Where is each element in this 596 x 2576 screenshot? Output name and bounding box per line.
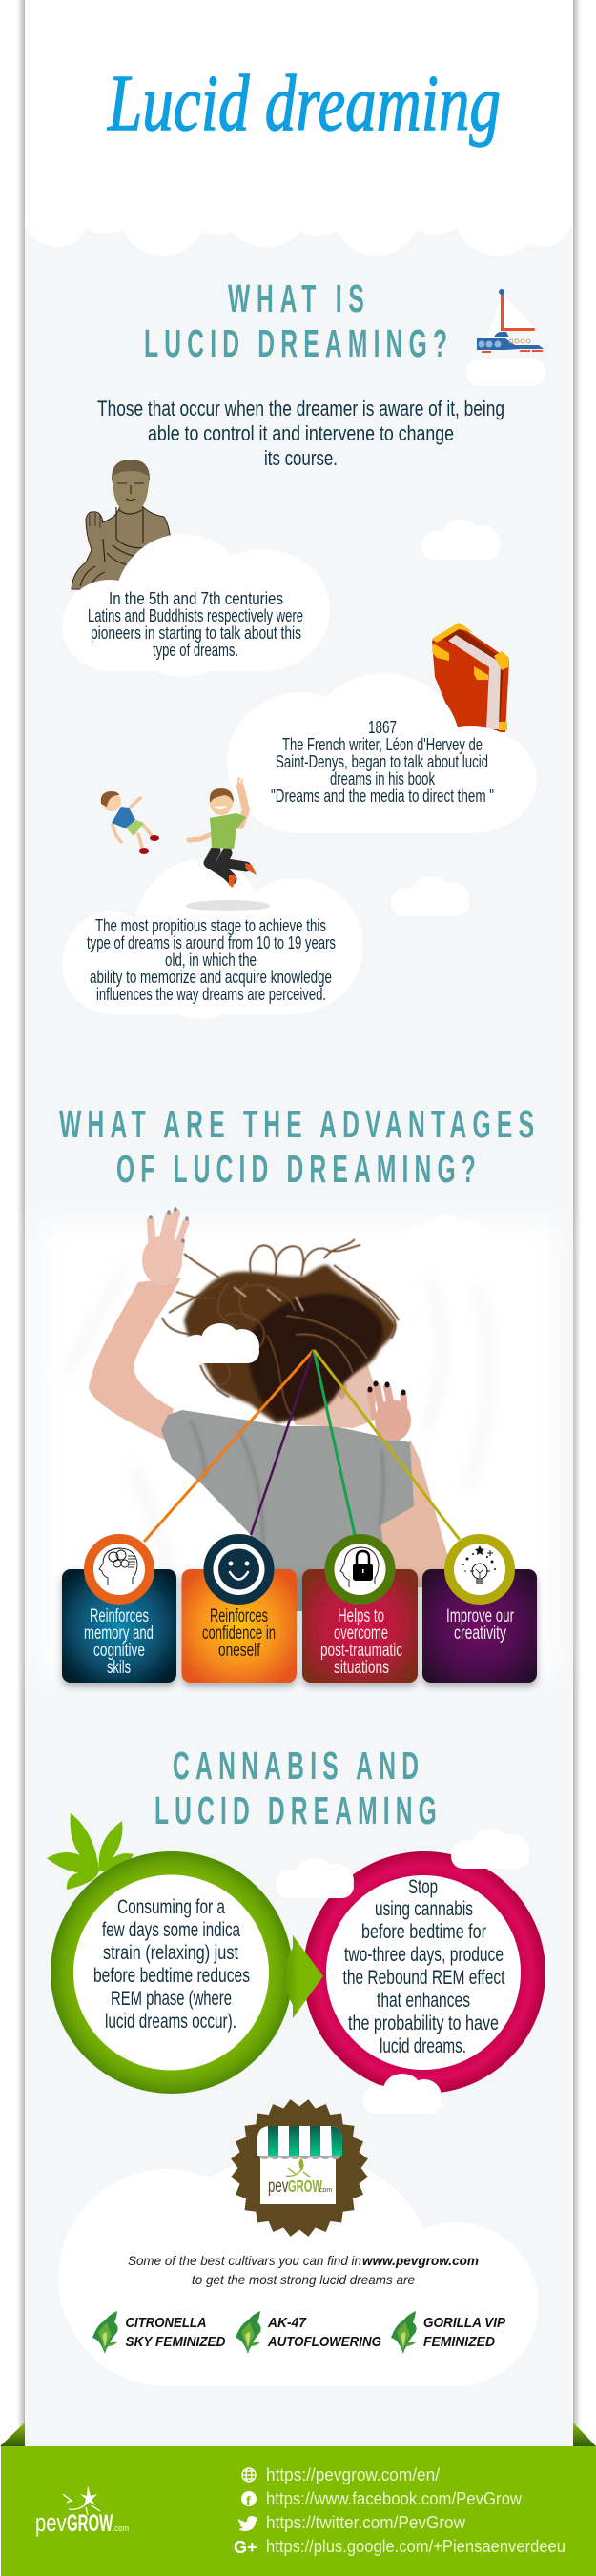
panel: most propitious stage [62, 859, 363, 1019]
panel: 5th and 7th centuries [62, 534, 330, 677]
intro text: its course. [264, 446, 338, 470]
product: gorilla vip: FEMINIZED [423, 2334, 495, 2350]
right arm [380, 1440, 450, 1587]
text: consuming indica [93, 1896, 250, 2033]
arrow [283, 1935, 323, 2018]
panel: 1867: The French writer, Léon d'Hervey de [282, 735, 483, 754]
product: citronella: CITRONELLA [126, 2315, 206, 2331]
cloud: over hair [181, 1323, 259, 1363]
card: confidence: confidence in [202, 1624, 276, 1644]
connector lines [144, 1350, 460, 1542]
footer folds [0, 2423, 596, 2446]
panel: cultivars cloud [58, 2152, 539, 2386]
panel: most propitious stage: old, in which the [165, 951, 257, 970]
panel: most propitious stage: The most propitious stage to achieve this [95, 916, 326, 935]
icon: google plus: G+ [234, 2538, 257, 2557]
text: consuming indica: REM phase (where [111, 1988, 232, 2010]
footer logo: .com [113, 2524, 129, 2533]
heading: what is lucid dreaming: WHAT IS [228, 277, 364, 321]
product: citronella [92, 2311, 226, 2354]
link: facebook: https://www.facebook.com/PevGrow [266, 2489, 523, 2508]
photo: woman sleeping on white sheets [40, 1209, 558, 1678]
heading: cannabis [154, 1745, 437, 1833]
cloud: small lower right [391, 876, 469, 916]
card: post-traumatic: situations [334, 1658, 389, 1678]
panel: 1867: 1867 [368, 718, 397, 737]
badge: shop: pev [268, 2177, 289, 2197]
card: creativity: Improve our [446, 1606, 514, 1626]
intro text [97, 397, 504, 470]
text: stop using cannabis: two-three days, produce [344, 1944, 504, 1966]
card: memory: memory and [84, 1624, 154, 1644]
footer logo: pev [35, 2508, 67, 2538]
card: confidence [181, 1569, 297, 1683]
panel: most propitious stage: ability to memorize and acquire knowledge [90, 968, 332, 987]
panel: most propitious stage: type of dreams is around from 10 to 19 years [87, 933, 336, 952]
badge: shop: GROW [288, 2177, 323, 2197]
text: stop using cannabis: lucid dreams. [380, 2035, 466, 2057]
text: cultivars intro: to get the most strong lucid dreams are [192, 2272, 415, 2287]
text: cultivars intro [128, 2253, 479, 2287]
card: post-traumatic: overcome [334, 1624, 388, 1644]
text: stop using cannabis: the Rebound REM effect [343, 1967, 505, 1989]
card: memory [62, 1569, 176, 1683]
product: ak-47: AUTOFLOWERING [267, 2334, 381, 2350]
card: post-traumatic [302, 1569, 418, 1683]
icon: smiley [208, 1539, 269, 1600]
text: consuming indica: strain (relaxing) just [103, 1942, 238, 1964]
card: memory: Reinforces [90, 1606, 149, 1626]
text: cultivars intro: Some of the best cultivars you can find in [128, 2253, 361, 2268]
icon: globe [242, 2468, 256, 2482]
footer logo: GROW [67, 2510, 113, 2537]
heading: advantages [59, 1103, 534, 1192]
text: cultivars intro: www.pevgrow.com [362, 2253, 479, 2268]
product: citronella: SKY FEMINIZED [126, 2334, 226, 2350]
icon: sailboat on cloud [466, 289, 545, 386]
product: gorilla vip: GORILLA VIP [423, 2315, 506, 2331]
right hand [370, 1383, 411, 1441]
product: gorilla vip [391, 2311, 506, 2354]
text: consuming indica: before bedtime reduces [93, 1965, 250, 1987]
panel: 5th and 7th centuries: Latins and Buddhists respectively were [88, 606, 303, 625]
text: stop using cannabis: the probability to have [348, 2013, 499, 2034]
card: confidence: oneself [218, 1641, 261, 1661]
left hand [142, 1209, 187, 1285]
heading: what is lucid dreaming [144, 277, 447, 366]
icon: red book [432, 623, 509, 732]
panel: 1867: dreams in his book [330, 769, 436, 788]
link: website: https://pevgrow.com/en/ [266, 2465, 440, 2484]
left arm [89, 1278, 181, 1440]
card: post-traumatic: post-traumatic [320, 1641, 402, 1661]
text: consuming indica: Consuming for a [117, 1896, 225, 1918]
icon: padlock in head [330, 1539, 391, 1600]
card: memory: cognitive [93, 1641, 145, 1661]
cloud: below pink circle [363, 2074, 442, 2114]
intro text: able to control it and intervene to change [148, 421, 454, 445]
link: twitter: https://twitter.com/PevGrow [266, 2513, 466, 2532]
panel: stop using cannabis circle [303, 1851, 545, 2094]
icon: cannabis leaf [47, 1813, 134, 1890]
text: stop using cannabis: Stop [408, 1876, 438, 1898]
illustration: jumping child in green [186, 777, 270, 911]
hair [162, 1239, 399, 1423]
card: creativity [422, 1569, 537, 1683]
product: ak-47: AK-47 [267, 2315, 307, 2331]
heading: advantages: WHAT ARE THE ADVANTAGES [59, 1103, 534, 1147]
text: consuming indica: lucid dreams occur). [105, 2011, 236, 2033]
cloud: over sheet [407, 1215, 485, 1255]
text: stop using cannabis: that enhances [377, 1990, 470, 2012]
icon: buddha statue [72, 460, 174, 591]
top white cloud band [25, 0, 573, 256]
cloud: small top right [421, 520, 500, 560]
heading: cannabis: LUCID DREAMING [154, 1789, 437, 1833]
panel: 5th and 7th centuries: pioneers in starting to talk about this [91, 624, 301, 643]
card: confidence: Reinforces [210, 1606, 268, 1626]
icon: facebook [241, 2491, 257, 2508]
panel: 5th and 7th centuries: type of dreams. [153, 641, 238, 660]
card: post-traumatic: Helps to [338, 1606, 384, 1626]
icon: light bulb with stars [449, 1539, 510, 1600]
card: memory: skils [107, 1658, 131, 1678]
text: stop using cannabis [343, 1876, 505, 2057]
panel: consuming indica circle [51, 1851, 293, 2094]
product: ak-47 [236, 2311, 381, 2354]
text: stop using cannabis: before bedtime for [361, 1921, 486, 1943]
text: stop using cannabis: using cannabis [375, 1898, 473, 1920]
card: creativity: creativity [454, 1624, 506, 1644]
cloud: between circles [276, 1858, 354, 1898]
cloud: top right of pink circle [451, 1829, 529, 1869]
link: google plus: https://plus.google.com/+Piensaenverdeeu [266, 2537, 565, 2556]
footer band [1, 2446, 596, 2576]
panel: 1867: Saint-Denys, began to talk about lucid [276, 752, 488, 771]
badge: shop: .com [318, 2187, 332, 2194]
grey shirt [161, 1410, 414, 1611]
heading: what is lucid dreaming: LUCID DREAMING? [144, 322, 447, 366]
icon: brain in head [89, 1539, 150, 1600]
icon: twitter [238, 2516, 257, 2531]
panel: most propitious stage: influences the way dreams are perceived. [96, 985, 326, 1004]
heading: advantages: OF LUCID DREAMING? [116, 1148, 476, 1192]
panel: 5th and 7th centuries: In the 5th and 7th centuries [109, 589, 283, 608]
footer logo [35, 2485, 129, 2538]
neck and face [291, 1363, 377, 1428]
text: consuming indica: few days some indica [102, 1919, 240, 1941]
panel: 1867: "Dreams and the media to direct them " [271, 787, 494, 806]
heading: cannabis: CANNABIS AND [173, 1745, 419, 1789]
illustration: flying child in blue [101, 791, 159, 854]
panel: 1867 [227, 673, 537, 833]
icon: facebook: f [246, 2493, 251, 2508]
badge: shop [231, 2099, 368, 2237]
